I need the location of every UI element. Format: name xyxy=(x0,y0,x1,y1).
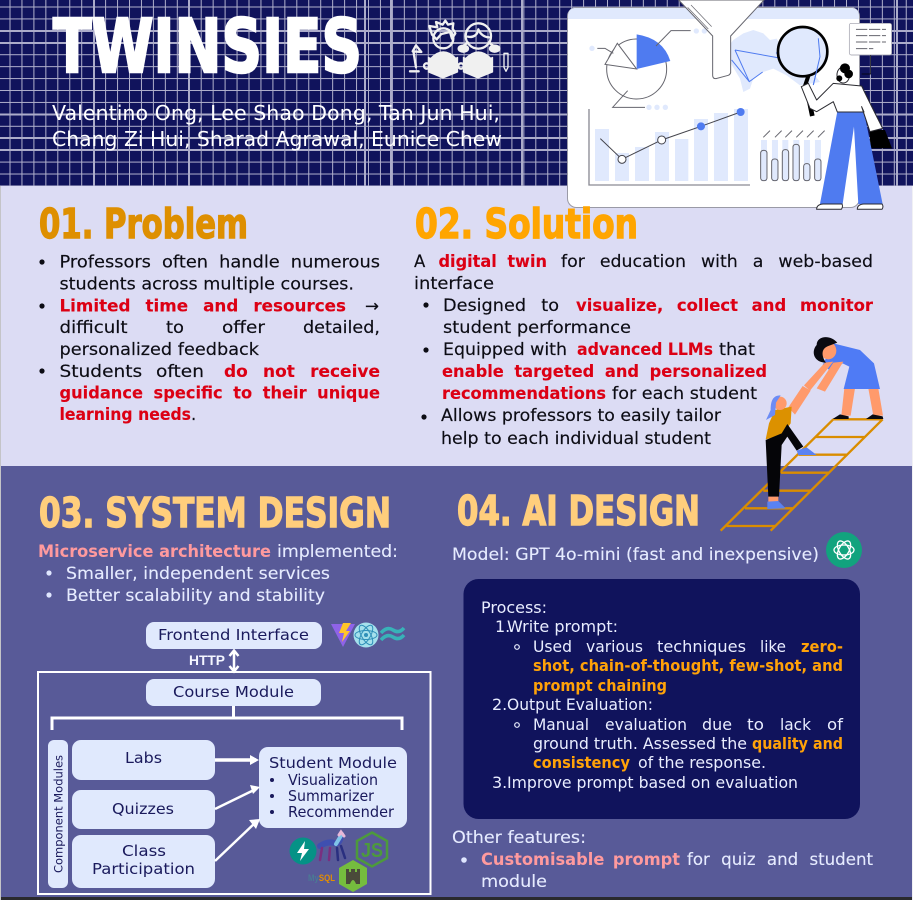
text block: solution: recommendations xyxy=(442,384,606,403)
student module box xyxy=(259,747,407,828)
text block: solution: that xyxy=(719,340,756,359)
panel: process: consistency xyxy=(533,753,631,772)
text block: problem bullets: Limited time and resources xyxy=(60,296,346,316)
text block: solution: advanced LLMs xyxy=(577,340,713,359)
panel: process: Used xyxy=(533,637,572,656)
text block: problem bullets: detailed, xyxy=(303,318,380,337)
text block: problem bullets: Professors often handle numerous xyxy=(60,252,380,272)
frontend box: Frontend Interface xyxy=(158,626,309,644)
quizzes box: Quizzes xyxy=(112,800,174,818)
text block: other features: module xyxy=(481,872,547,891)
authors: Valentino Ong, Lee Shao Dong, Tan Jun Hui, xyxy=(52,101,500,125)
title: TWINSIES xyxy=(53,4,362,90)
panel: process: 1. xyxy=(495,617,510,636)
text block: other features: Customisable prompt xyxy=(481,850,680,869)
text block: problem bullets: learning needs xyxy=(60,405,191,424)
illustration: helping hand on ladder xyxy=(721,337,883,531)
panel: header grid banner xyxy=(0,0,913,186)
text block: solution: enable targeted and personalized xyxy=(442,362,767,381)
pie chart xyxy=(597,31,691,107)
text block: solution xyxy=(414,252,874,448)
heading: system design: 03. SYSTEM DESIGN xyxy=(39,489,391,537)
text block: solution: visualize, collect and monitor xyxy=(576,296,874,315)
magnifying glass xyxy=(778,27,827,76)
text block: problem bullets: to xyxy=(166,318,184,337)
dashboard card xyxy=(568,8,860,208)
note card xyxy=(849,23,892,55)
arrows to student module xyxy=(215,755,260,861)
panel: process: various xyxy=(586,637,643,656)
bar chart xyxy=(595,109,748,181)
authors: Chang Zi Hui, Sharad Agrawal, Eunice Chew xyxy=(52,127,502,151)
backend container xyxy=(38,672,430,894)
text block: architecture xyxy=(38,542,398,605)
class participation box xyxy=(72,835,215,888)
text block: problem bullets: → xyxy=(365,296,379,316)
icon: nestjs hexagon xyxy=(339,860,367,892)
system architecture diagram xyxy=(38,622,430,894)
text block: solution: student performance xyxy=(443,318,631,337)
HTTP link: HTTP xyxy=(189,653,225,668)
course module box xyxy=(146,679,321,706)
text block: problem bullets xyxy=(39,252,380,424)
funnel xyxy=(679,0,764,79)
text block: solution: Equipped with xyxy=(443,340,567,359)
icon: react xyxy=(354,622,378,648)
text block: architecture: Microservice architecture xyxy=(38,542,271,561)
text block: solution: for each student xyxy=(612,384,758,403)
text: model: Model: GPT 4o-mini (fast and inexpensive) xyxy=(452,545,819,564)
text block: other features xyxy=(452,828,874,891)
frontend box xyxy=(146,622,322,649)
class participation box: Class xyxy=(122,842,166,860)
text block: problem bullets: do not receive xyxy=(224,362,380,381)
network lines xyxy=(732,38,820,85)
text block: problem bullets: . xyxy=(191,405,196,424)
quizzes box xyxy=(72,790,215,829)
illustration: analytics dashboard with analyst xyxy=(568,0,892,209)
panel: process: Write prompt: xyxy=(507,617,618,636)
text block: architecture: Smaller, independent services xyxy=(66,564,330,583)
text block: architecture: implemented: xyxy=(277,542,398,561)
world map xyxy=(727,30,820,92)
heading: AI design: 04. AI DESIGN xyxy=(457,487,700,535)
text block: solution: interface xyxy=(414,274,494,293)
component modules label: Component Modules xyxy=(52,755,66,873)
icon: fastapi xyxy=(290,838,316,864)
panel: problem and solution background xyxy=(0,186,913,466)
text block: problem bullets: guidance specific to their unique xyxy=(60,384,380,402)
icon: uvicorn xyxy=(320,832,345,860)
panel: process: 3. xyxy=(492,773,507,792)
icon: twins reading books xyxy=(410,21,508,78)
text block: solution: A xyxy=(414,252,426,271)
panel: process: prompt chaining xyxy=(533,676,667,695)
ladder xyxy=(721,419,883,531)
bracket connector xyxy=(52,706,402,730)
text block: problem bullets: offer xyxy=(222,318,265,337)
text block: solution: help to each individual student xyxy=(441,429,712,448)
text block: solution: Designed to xyxy=(443,296,559,315)
labs box xyxy=(72,740,215,780)
icon: mysql: MySQL xyxy=(308,873,335,883)
student module box: Visualization xyxy=(288,771,378,789)
text block: architecture: Better scalability and stability xyxy=(66,586,325,605)
panel: process: of xyxy=(827,715,843,734)
panel: process: ground truth. Assessed the xyxy=(533,734,747,753)
panel: process: evaluation xyxy=(605,715,687,734)
panel: process: shot, chain-of-thought, few-shot, and xyxy=(533,656,843,675)
panel: process: quality and xyxy=(752,734,843,753)
panel: process: zero- xyxy=(801,637,843,656)
panel: process: lack xyxy=(780,715,812,734)
heading: problem: 01. Problem xyxy=(39,200,248,248)
panel: process: like xyxy=(760,637,786,656)
panel: process: of the response. xyxy=(638,753,766,772)
icon: nodejs: JS xyxy=(361,840,383,862)
panel: process: Process: xyxy=(481,598,547,617)
icon: chatgpt xyxy=(826,532,862,568)
heading: solution: 02. Solution xyxy=(415,200,638,248)
text block: problem bullets: difficult xyxy=(60,318,128,337)
component modules label xyxy=(48,740,68,888)
text block: problem bullets: personalized feedback xyxy=(60,340,259,359)
icon: tailwind xyxy=(381,628,404,640)
student module box: Recommender xyxy=(288,803,395,821)
standing woman xyxy=(804,337,883,419)
HTTP link xyxy=(189,650,238,672)
text block: other features: Other features: xyxy=(452,828,586,847)
trend line xyxy=(600,112,741,159)
analyst xyxy=(869,130,892,148)
panel: process: due xyxy=(702,715,732,734)
small bars xyxy=(761,140,821,181)
text block: other features: for quiz and student xyxy=(687,850,874,869)
labs box: Labs xyxy=(125,749,162,767)
panel: process: Output Evaluation: xyxy=(507,695,653,714)
text block: solution: digital twin xyxy=(438,252,547,271)
panel: process xyxy=(464,579,860,819)
panel: process: Improve prompt based on evaluation xyxy=(507,773,798,792)
authors xyxy=(52,101,502,151)
class participation box: Participation xyxy=(92,860,195,878)
course module box: Course Module xyxy=(173,683,294,701)
panel: process: Manual xyxy=(533,715,589,734)
text block: problem bullets: Students often xyxy=(60,362,204,381)
panel: process: to xyxy=(747,715,764,734)
panel: system and AI design background xyxy=(0,466,913,897)
panel: process: 2. xyxy=(492,695,507,714)
text block: solution: Allows professors to easily tailor xyxy=(441,406,721,425)
text block: problem bullets: students across multiple courses. xyxy=(60,274,354,294)
icon: vite xyxy=(331,623,355,647)
text block: solution: for education with a web-based xyxy=(561,252,873,271)
climbing woman xyxy=(766,386,817,509)
panel: process: techniques xyxy=(657,637,746,656)
student module box: Summarizer xyxy=(288,787,375,805)
student module box: Student Module xyxy=(269,754,397,772)
icon: nodejs xyxy=(357,832,387,866)
